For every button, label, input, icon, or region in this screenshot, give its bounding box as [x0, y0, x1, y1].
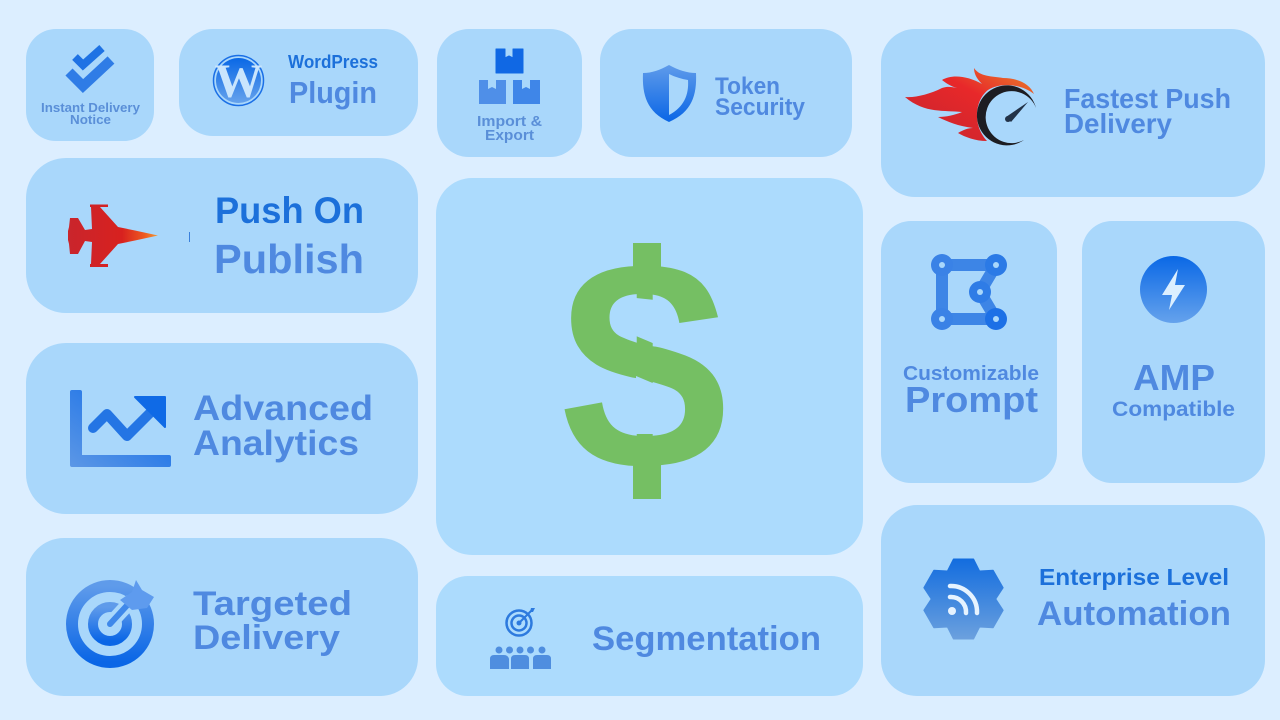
panel: Segmentation	[436, 576, 863, 696]
text: Advanced Analytics: Advanced	[193, 389, 373, 428]
panel: Enterprise Level Automation	[881, 505, 1265, 696]
panel: Token Security	[600, 29, 852, 157]
icon: WordPress logo: W	[214, 55, 262, 108]
icon: dollar sign: $	[561, 197, 727, 533]
text: Import & Export	[477, 113, 542, 144]
text: Targeted Delivery	[193, 585, 352, 657]
icon: audience target	[490, 608, 551, 669]
text: Instant Delivery Notice	[41, 101, 140, 127]
text: Import & Export: Import &	[477, 113, 542, 130]
text: Targeted Delivery: Delivery	[193, 619, 340, 657]
text: Push On: Push On	[215, 190, 364, 231]
decorative tick	[189, 232, 190, 242]
text: Advanced Analytics: Analytics	[193, 424, 359, 463]
text: Token Security: Security	[715, 94, 806, 121]
text: Enterprise Level: Enterprise Level	[1039, 564, 1229, 590]
panel: Customizable Prompt	[881, 221, 1057, 483]
panel: Instant Delivery Notice	[26, 29, 154, 141]
text: Advanced Analytics	[193, 389, 373, 463]
panel: Push On Publish	[26, 158, 418, 313]
text: Segmentation: Segmentation	[592, 620, 821, 658]
text: Import & Export: Export	[485, 127, 534, 144]
text: Compatible: Compatible	[1112, 398, 1235, 421]
panel: central pricing	[436, 178, 863, 555]
panel: Targeted Delivery	[26, 538, 418, 696]
panel: Fastest Push Delivery	[881, 29, 1265, 197]
text: Token Security	[715, 73, 806, 121]
icon: flaming speedometer	[905, 68, 1036, 145]
text: Fastest Push Delivery: Delivery	[1064, 108, 1172, 139]
icon: gear with signal	[924, 559, 1003, 639]
icon: shape editor	[931, 254, 1007, 330]
text: Publish: Publish	[214, 236, 364, 282]
text: WordPress: WordPress	[288, 52, 378, 72]
panel: Advanced Analytics	[26, 343, 418, 514]
text: Instant Delivery Notice: Notice	[70, 113, 111, 127]
panel: AMP Compatible	[1082, 221, 1265, 483]
icon: shield	[643, 65, 696, 122]
text: Instant Delivery Notice: Instant Delivery	[41, 101, 140, 115]
text: Customizable: Customizable	[903, 363, 1039, 385]
icon: red jet	[68, 204, 158, 267]
text: Targeted Delivery: Targeted	[193, 585, 352, 623]
text: Automation: Automation	[1037, 595, 1231, 633]
panel: Import & Export	[437, 29, 582, 157]
panel: WordPress Plugin	[179, 29, 418, 136]
text: Fastest Push Delivery	[1064, 83, 1231, 139]
text: Fastest Push Delivery: Fastest Push	[1064, 83, 1231, 114]
icon: stacked boxes	[479, 49, 540, 104]
icon: analytics chart	[70, 390, 171, 467]
icon: double check mark	[69, 48, 111, 86]
text: Prompt: Prompt	[905, 379, 1038, 420]
icon: AMP bolt	[1140, 256, 1207, 323]
text: AMP: AMP	[1133, 357, 1215, 398]
text: Token Security: Token	[715, 73, 780, 100]
text: Plugin: Plugin	[289, 75, 377, 110]
icon: target with arrow	[72, 580, 154, 662]
